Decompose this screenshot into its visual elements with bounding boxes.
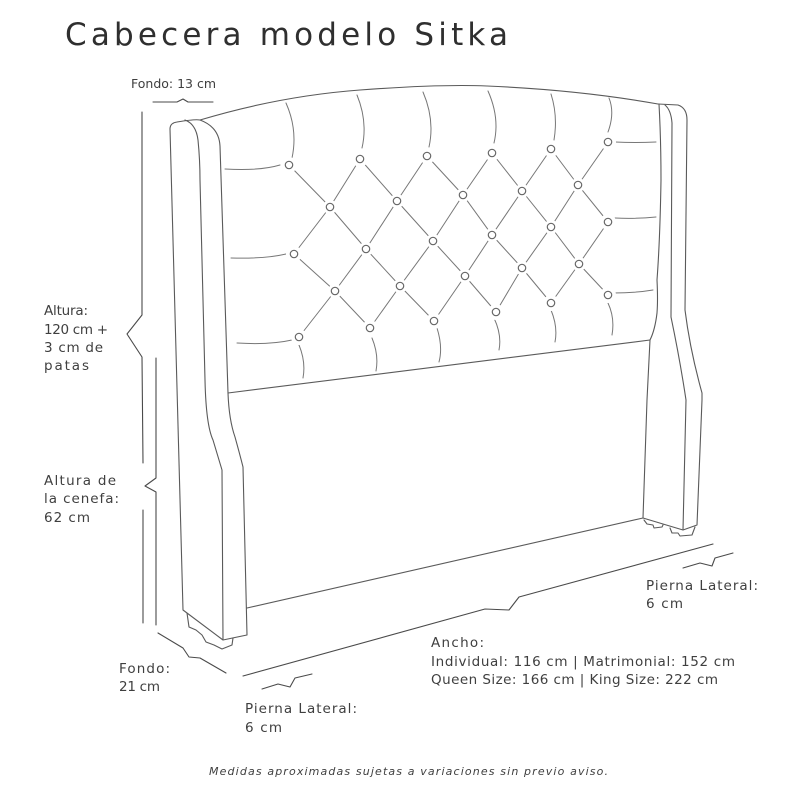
left foot (187, 613, 233, 649)
label: width by size (431, 635, 735, 688)
tufting buttons (281, 134, 616, 345)
headboard drawing (170, 86, 702, 649)
dimension bracket: valance height (145, 358, 156, 625)
label: width by size: Queen Size: 166 cm | King Size: 222 cm (431, 672, 718, 688)
label: left side leg: 6 cm (245, 720, 282, 736)
tufting seams (289, 142, 608, 337)
label: height: Altura: (44, 303, 88, 319)
label: width by size: Ancho: (431, 635, 484, 651)
right wing outline (643, 104, 702, 530)
label: height: patas (44, 358, 89, 374)
label: left side leg (245, 701, 357, 736)
vertical and side seams (225, 91, 656, 378)
label: right side leg: 6 cm (646, 596, 683, 612)
footnote: Medidas aproximadas sujetas a variaciones sin previo aviso. (209, 765, 608, 778)
label: right side leg: Pierna Lateral: (646, 578, 758, 594)
label: bottom depth (119, 661, 170, 695)
label: valance height (44, 473, 119, 526)
label: height: 3 cm de (44, 340, 103, 356)
right feet (644, 520, 695, 536)
left wing outline (170, 120, 247, 640)
dimension bracket: top depth (153, 99, 213, 102)
label: valance height: Altura de (44, 473, 116, 489)
label: left side leg: Pierna Lateral: (245, 701, 357, 717)
title: Cabecera modelo Sitka (65, 17, 508, 53)
label: width by size: Individual: 116 cm | Matrimonial: 152 cm (431, 654, 735, 670)
dimension bracket: width (243, 544, 713, 676)
label: top depth: Fondo: 13 cm (131, 76, 216, 91)
label: right side leg (646, 578, 758, 612)
dimension bracket: total height (127, 112, 143, 623)
dimension bracket: right side leg (683, 553, 733, 568)
label: height: 120 cm + (44, 322, 108, 338)
valance bottom edge (247, 518, 643, 608)
dimension bracket: left side leg (262, 674, 312, 689)
label: valance height: la cenefa: (44, 491, 119, 507)
label: bottom depth: Fondo: (119, 661, 170, 677)
dimension bracket: bottom depth (158, 633, 226, 673)
label: bottom depth: 21 cm (119, 679, 160, 695)
bottom edge of tufted panel (228, 340, 650, 393)
label: height (44, 303, 108, 374)
top curve of headboard (200, 86, 658, 120)
label: valance height: 62 cm (44, 510, 90, 526)
